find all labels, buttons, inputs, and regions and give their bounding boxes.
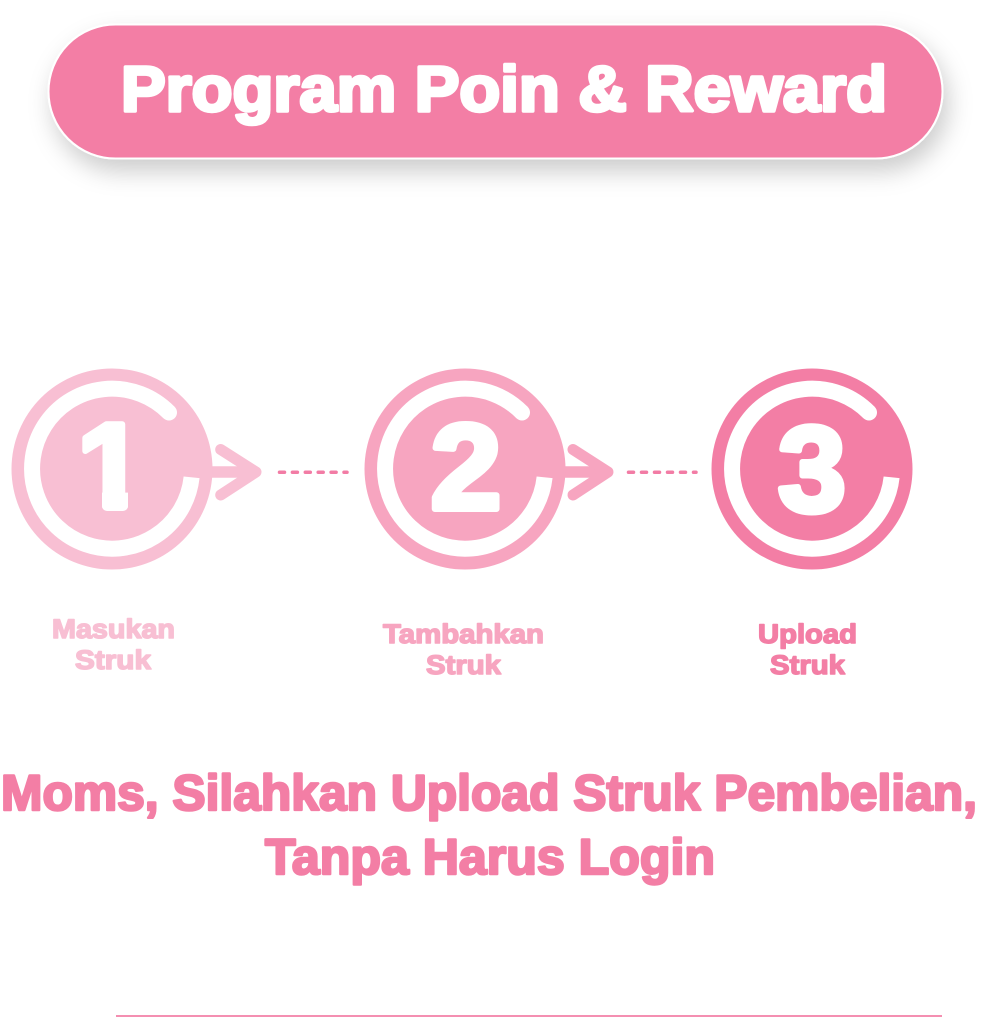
icon: circle 3: 3 (778, 401, 846, 537)
label: Tambahkan Struk: Tambahkan (383, 619, 544, 649)
label: Tambahkan Struk (383, 619, 544, 680)
step 2 (364, 368, 608, 680)
message heading (1, 765, 977, 885)
label: Upload Struk: Upload (758, 619, 857, 649)
icon: circle 1: 1 (77, 398, 145, 534)
icon: circle 1 (12, 368, 212, 570)
step 1 (12, 368, 256, 675)
connector dashes 2 (628, 471, 696, 474)
banner pill (48, 24, 942, 158)
label: Masukan Struk: Masukan (52, 614, 175, 644)
label: Tambahkan Struk: Struk (426, 650, 502, 680)
message heading: Moms, Silahkan Upload Struk Pembelian, (1, 765, 977, 821)
icon: circle 3 (712, 368, 912, 570)
icon: arrow 1 (205, 450, 256, 495)
icon: arrow 2 (558, 450, 608, 495)
icon: circle 2 (364, 368, 566, 570)
label: Upload Struk (758, 619, 857, 680)
step 3 (712, 368, 912, 680)
label: Masukan Struk: Struk (75, 645, 152, 675)
message heading: Tanpa Harus Login (265, 829, 715, 885)
label: Upload Struk: Struk (770, 650, 846, 680)
bottom rule (116, 1015, 942, 1017)
connector dashes 1 (280, 471, 347, 474)
icon: circle 2: 2 (430, 399, 502, 535)
label: Masukan Struk (52, 614, 175, 675)
title banner (48, 24, 942, 158)
title: Program Poin & Reward (121, 53, 887, 125)
